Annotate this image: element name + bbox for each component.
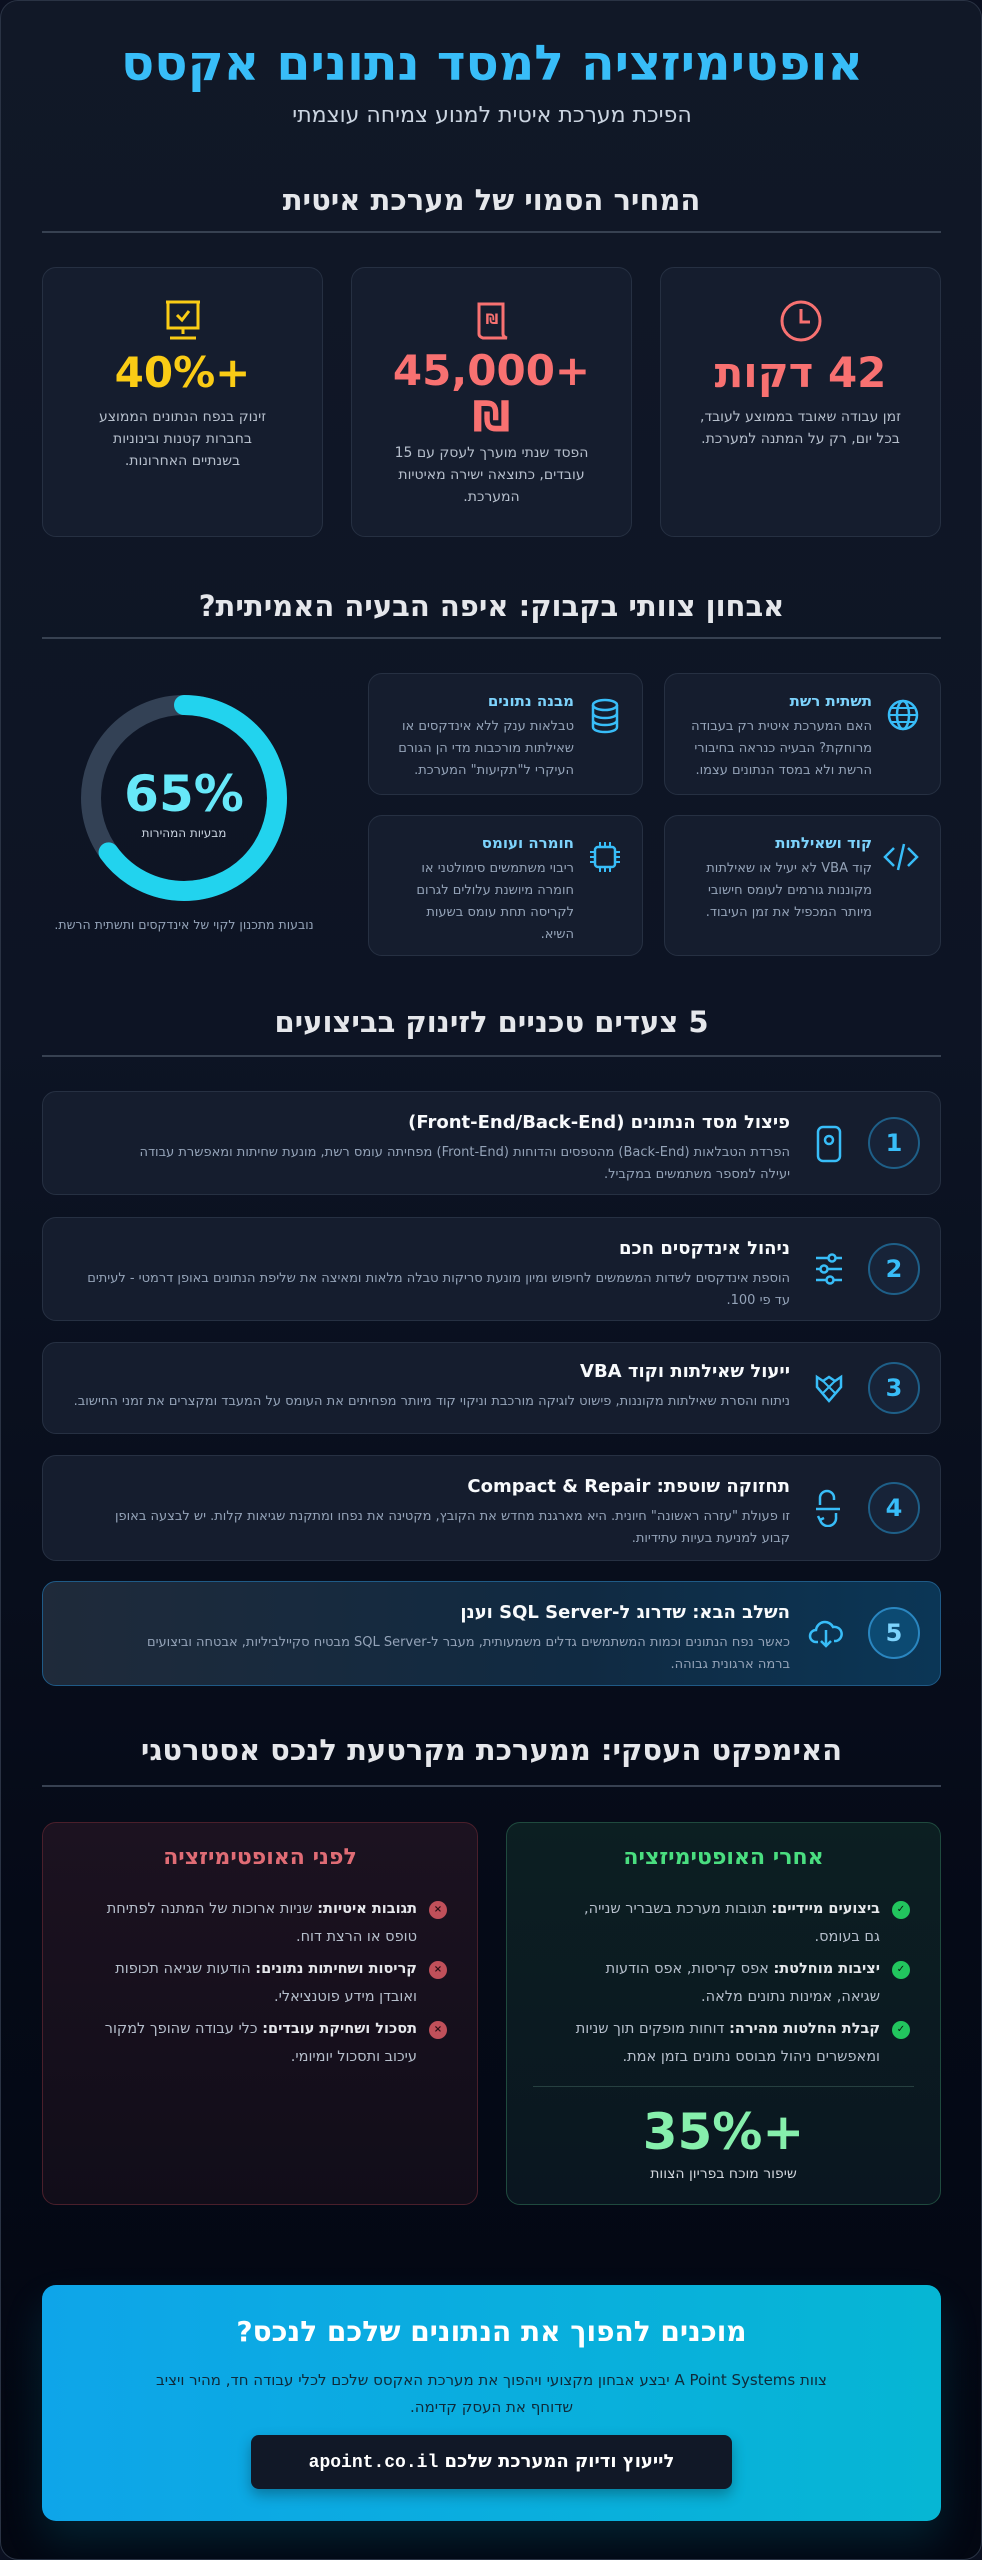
step 2: ניהול אינדקסים חכם (619, 1238, 790, 1259)
icon: split (816, 1126, 842, 1162)
diagnosis card: code: קוד VBA לא יעיל או שאילתות מקוננות גורמים לעומס חישובי מיותר המכפיל את זמן העיבוד. (706, 861, 872, 920)
step 3: ניתוח והסרת שאילתות מקוננות, פישוט לוגיקה מורכבת וניקוי קוד מיותר מפחיתים את העומס על המעבד ומקצרים את זמני החישוב. (74, 1394, 790, 1409)
step 5: כאשר נפח הנתונים וכמות המשתמשים גדלים משמעותית, מעבר ל-SQL Server מבטיח סקיילביליות, אבטחה וביצועים ברמה ארגונית גבוהה. (147, 1635, 790, 1672)
diagnosis card: network (664, 673, 941, 795)
diagnosis card: data structure: מבנה נתונים (488, 692, 574, 710)
panel: before optimization (42, 1822, 478, 2205)
step 1: 1 (886, 1129, 902, 1157)
stat description: זינוק בנפח הנתונים הממוצע בחברות קטנות ובינוניות בשנתיים האחרונות. (99, 409, 266, 469)
heading: hidden cost: המחיר הסמוי של מערכת איטית (283, 183, 700, 217)
panel: after optimization: שיפור מוכח בפריון הצוות (650, 2166, 797, 2182)
step 2: 2 (886, 1255, 902, 1283)
stat: 35%: 35%+ (643, 2103, 804, 2161)
step 3: ייעול שאילתות וקוד VBA (580, 1361, 790, 1382)
panel: after optimization: אחרי האופטימיזציה (623, 1845, 824, 1870)
diagnosis card: hardware (368, 815, 643, 956)
step 1: הפרדת הטבלאות (Back-End) מהטפסים והדוחות (Front-End) מפחיתה עומס רשת, מונעת שחיתות ומאפשרת עבודה יעילה למספר משתמשים במקביל. (139, 1145, 790, 1182)
CTA button (251, 2435, 732, 2489)
item: frustration: × (434, 2024, 442, 2035)
diagnosis card: data structure: טבלאות ענק ללא אינדקסים או שאילתות מורכבות מדי הן הגורם העיקרי ל"תקיעות" המערכת. (398, 719, 574, 778)
step 3: 3 (886, 1374, 902, 1402)
icon: monitor check (166, 300, 200, 340)
donut caption: נובעות מתכנון לקוי של אינדקסים ותשתית הרשת. (54, 917, 314, 932)
subtitle: הפיכת מערכת איטית למנוע צמיחה עוצמתי (292, 103, 692, 128)
step 1: פיצול מסד הנתונים (Front-End/Back-End) (408, 1112, 790, 1133)
step 2 (42, 1217, 941, 1321)
stat card: 40% (42, 267, 323, 537)
donut chart: 65% (54, 695, 314, 932)
step 5 (42, 1581, 941, 1686)
item: instant performance: ✓ (897, 1904, 905, 1915)
item: fast decisions: ✓ (897, 2024, 905, 2035)
icon: refresh (816, 1490, 840, 1527)
diagnosis card: data structure (368, 673, 643, 795)
panel: before optimization: לפני האופטימיזציה (163, 1845, 357, 1870)
title: אופטימיזציה למסד נתונים אקסס (121, 35, 863, 92)
step 5: 5 (886, 1619, 902, 1647)
panel: after optimization (506, 1822, 941, 2205)
icon: globe (888, 700, 918, 730)
item: stability: ✓ (897, 1964, 905, 1975)
item: frustration: תסכול ושחיקת עובדים: כלי עבודה שהופך למקור עיכוב ותסכול יומיומי. (105, 2021, 417, 2065)
heading: 5 steps: 5 צעדים טכניים לזינוק בביצועים (274, 1005, 709, 1039)
diagnosis card: network: תשתית רשת (790, 692, 872, 710)
item: fast decisions: קבלת החלטות מהירה: דוחות מופקים תוך שניות ומאפשרים ניהול מבוסס נתונים בזמן אמת. (576, 2021, 880, 2065)
icon: database (592, 698, 618, 734)
stat value: 42 דקות (715, 348, 886, 397)
step 2: הוספת אינדקסים לשדות המשמשים לחיפוש ומיון מונעת סריקות טבלה מלאות ומאיצה את שליפת הנתונים באופן דרמטי - לעיתים עד פי 100. (87, 1271, 790, 1308)
item: slow responses: × (434, 1904, 442, 1915)
step 1 (42, 1091, 941, 1195)
icon: sliders (816, 1253, 842, 1285)
stat description: הפסד שנתי מוערך לעסק עם 15 עובדים, כתוצאה ישירה מאיטיות המערכת. (395, 445, 588, 505)
item: crashes: × (434, 1964, 442, 1975)
step 4: זו פעולת "עזרה ראשונה" חיונית. היא מארגנת מחדש את הקובץ, מקטינה את נפחו ומתקנת שגיאות קלות. יש לבצעה באופן קבוע למניעת בעיות עתידיות. (115, 1509, 790, 1546)
stat card: 42 minutes (660, 267, 941, 537)
CTA text: צוות A Point Systems יבצע אבחון מקצועי ויהפוך את מערכת האקסס שלכם לכלי עבודה חד, מהיר ויציב שדוחף את העסק קדימה. (156, 2371, 827, 2416)
item: slow responses: תגובות איטיות: שניות ארוכות של המתנה לפתיחת טופס או הרצת דוח. (107, 1901, 417, 1945)
item: crashes: קריסות ושחיתות נתונים: הודעות שגיאה תכופות ואובדן מידע פוטנציאלי. (115, 1961, 417, 2005)
diagnosis card: hardware: חומרה ועומס (482, 834, 574, 852)
stat value (393, 346, 590, 441)
heading: business impact: האימפקט העסקי: ממערכת מקרטעת לנכס אסטרטגי (141, 1733, 842, 1767)
donut chart: 65%: מבעיות המהירות (142, 826, 226, 840)
icon: code (883, 844, 919, 870)
stat value: 40%+ (115, 348, 250, 397)
stat value: ₪ (472, 392, 510, 441)
icon: receipt: ₪ (485, 312, 498, 328)
step 4 (42, 1455, 941, 1561)
step 3 (42, 1342, 941, 1434)
diagnosis card: code: קוד ושאילתות (775, 834, 872, 852)
step 4: תחזוקה שוטפת: Compact & Repair (467, 1476, 790, 1497)
CTA button: לייעוץ ודיוק המערכת שלכם apoint.co.il (309, 2451, 674, 2473)
stat description: זמן עבודה שאובד בממוצע לעובד, בכל יום, רק על המתנה למערכת. (700, 409, 901, 447)
CTA heading: מוכנים להפוך את הנתונים שלכם לנכס? (236, 2315, 747, 2348)
icon: receipt (478, 302, 508, 340)
item: stability: יציבות מוחלטת: אפס קריסות, אפס הודעות שגיאה, אמינות נתונים מלאה. (606, 1961, 880, 2005)
icon: wand (816, 1374, 842, 1403)
diagnosis card: network: האם המערכת איטית רק בעבודה מרוחקת? הבעיה כנראה בחיבורי הרשת ולא במסד הנתונים עצמו. (691, 719, 872, 778)
stat value: 45,000+ (393, 346, 590, 395)
diagnosis card: code (664, 815, 941, 956)
CTA panel (42, 2285, 941, 2521)
step 5: השלב הבא: שדרוג ל-SQL Server וענן (460, 1602, 790, 1623)
step 4: 4 (886, 1494, 902, 1522)
diagnosis card: hardware: ריבוי משתמשים סימולטני או חומרה מיושנת עלולים לגרום לקריסה תחת עומס בשעות השיא. (416, 861, 574, 942)
donut chart: 65%: 65% (124, 765, 244, 823)
heading: diagnosis: אבחון צוותי בקבוק: איפה הבעיה האמיתית? (199, 589, 784, 623)
item: instant performance: ביצועים מיידיים: תגובות מערכת בשבריר שנייה, גם בעומס. (584, 1901, 880, 1945)
stat card: 45,000 NIS (351, 267, 632, 537)
icon: clock (780, 300, 822, 342)
icon: chip (590, 842, 620, 872)
icon: cloud download (808, 1620, 843, 1648)
